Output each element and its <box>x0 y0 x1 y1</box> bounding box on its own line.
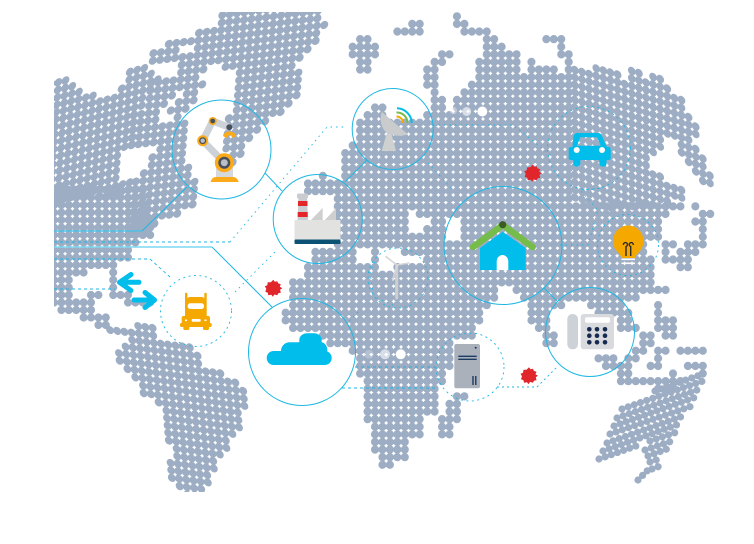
dotted circle: server <box>436 333 504 401</box>
icon: desk phone <box>567 314 614 349</box>
dotted circle: bulb <box>598 214 658 276</box>
line: robot to left edge <box>142 187 187 231</box>
arrow: left <box>120 274 139 290</box>
progress dots: south <box>364 349 406 359</box>
map: Siberia and far east <box>571 64 714 212</box>
dashed link: left edge to arrows <box>54 288 115 290</box>
dotted circle: turbine <box>368 248 428 308</box>
circle: satellite dish <box>352 88 433 170</box>
dashed link: turbine to cloud <box>348 262 397 322</box>
node circles <box>160 88 658 406</box>
circle: cloud <box>248 298 356 406</box>
dashed link: dish to car <box>433 125 553 157</box>
line: home to phone <box>544 288 557 301</box>
circle: factory <box>273 174 362 264</box>
icon: server tower <box>454 344 480 388</box>
bug: red splat north <box>524 165 542 182</box>
dashed link: home to bulb and car <box>560 188 603 245</box>
dotted link: up to dish <box>230 127 345 242</box>
dashed link: server to phone <box>497 367 557 387</box>
progress dots: north <box>450 106 487 116</box>
icon: factory <box>294 194 340 244</box>
line: robot to factory <box>265 173 282 191</box>
line: left edge thick segment lower <box>54 246 212 248</box>
dashed link: dish to home <box>428 163 453 190</box>
dashed link: cloud to server upper <box>355 366 437 368</box>
map: Eurasia, Africa and islands <box>286 16 710 465</box>
map: northern North America <box>124 2 326 235</box>
dotted circle: car <box>548 106 630 190</box>
line: left edge to cloud <box>212 247 272 307</box>
icon: exchange arrows <box>120 274 154 308</box>
dashed link: truck to factory <box>235 250 277 292</box>
map: South America <box>109 323 252 503</box>
circle: home <box>444 186 562 304</box>
icon: cloud <box>267 333 332 365</box>
line: factory to dish <box>345 160 367 182</box>
map: United States, Mexico and Caribbean <box>54 190 150 325</box>
dashed link: left edge horizontal <box>54 241 230 243</box>
icon: wind turbine <box>386 257 409 298</box>
icon: truck <box>180 293 212 330</box>
icon: robot arm <box>197 117 239 182</box>
icon: satellite dish <box>381 108 412 151</box>
line: left edge thick segment upper <box>54 230 142 232</box>
dotted circle: truck <box>160 276 232 346</box>
bug: red splat south <box>520 367 538 384</box>
map: Australia and Tasmania <box>599 374 703 480</box>
icon: home <box>473 221 533 270</box>
icon: car <box>569 133 611 166</box>
circle: robot <box>172 100 271 199</box>
infographic canvas <box>54 12 714 492</box>
map: Alaska and north-west <box>54 64 162 204</box>
connector lines <box>54 125 603 388</box>
icon: light bulb <box>613 226 644 264</box>
dashed link: cloud to server lower <box>342 387 438 389</box>
arrow: right <box>134 292 154 308</box>
dashed link: left edge to truck <box>54 259 170 277</box>
bug: red splat west <box>265 280 282 297</box>
circle: phone <box>546 288 634 376</box>
